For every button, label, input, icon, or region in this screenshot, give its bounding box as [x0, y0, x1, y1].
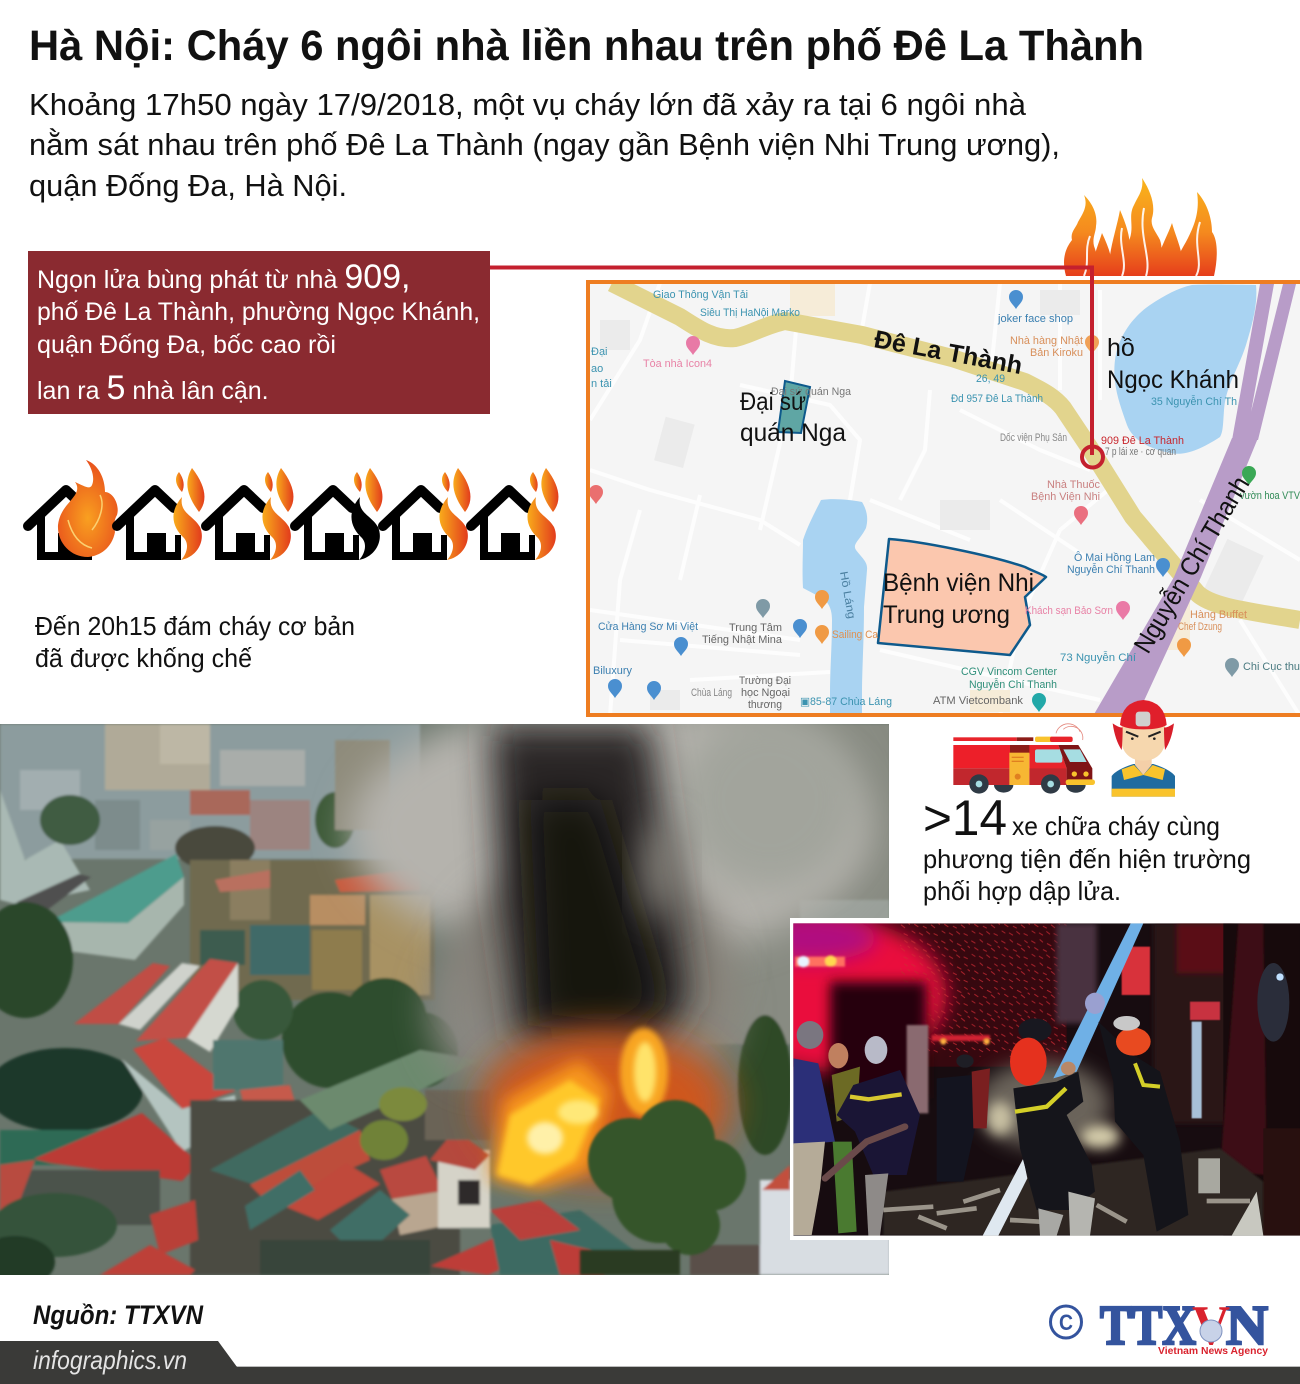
source credit: Nguồn: TTXVN — [33, 1300, 203, 1330]
firefighter with hose — [837, 1036, 920, 1236]
map: embassy label: quán Nga — [740, 419, 846, 447]
logo: TTXVN: V — [1192, 1295, 1230, 1357]
intro text — [29, 87, 1060, 203]
house 1 — [28, 490, 92, 560]
map: place labels: ao — [591, 363, 603, 375]
map: place labels: Giao Thông Vận Tải — [653, 289, 748, 301]
map: building footprints — [600, 290, 1264, 710]
map: place labels: 35 Nguyễn Chí Th — [1151, 395, 1237, 408]
right side — [700, 724, 890, 1044]
intro text: nằm sát nhau trên phố Đê La Thành (ngay gần Bệnh viện Nhi Trung ương), — [29, 127, 1060, 162]
footer bar — [0, 1341, 1300, 1384]
icon: firefighter — [1112, 700, 1175, 797]
firefighter left with ladder — [1010, 1018, 1095, 1236]
map: place labels: 73 Nguyễn Chí — [1060, 651, 1136, 664]
ladder — [1053, 923, 1143, 1078]
map: place labels: Tòa nhà Icon4 — [643, 358, 712, 370]
logo: TTXVN: Vietnam News Agency — [1158, 1345, 1268, 1357]
house 6 — [471, 468, 558, 560]
map: lake label: Ngọc Khánh — [1107, 366, 1239, 394]
map: place labels: Bản Kiroku — [1030, 347, 1083, 359]
second truck — [932, 1035, 990, 1045]
map: hospital label: Bệnh viện Nhi — [883, 569, 1034, 597]
photo: firefighters at night — [790, 918, 1300, 1240]
smoke — [350, 700, 870, 1080]
map: embassy label: Đại sứ — [740, 388, 806, 416]
icon: flames above map — [1064, 178, 1217, 276]
map: minor streets — [590, 283, 1300, 716]
left and central trees — [0, 902, 73, 1018]
house 5 — [383, 468, 470, 560]
map: road label Nguyen Chi Thanh: Nguyễn Chí Thanh — [1127, 471, 1255, 658]
icon: fire truck — [953, 724, 1095, 794]
map: road label De La Thanh: Đê La Thành — [872, 325, 1025, 380]
callout box: fire origin: lan ra 5 nhà lân cận. — [37, 369, 269, 407]
map: place labels: học Ngoại — [741, 687, 790, 699]
map: place labels: Hàng Buffet — [1190, 609, 1247, 621]
flames — [480, 1028, 730, 1190]
small trees — [425, 1090, 490, 1140]
truck glow — [793, 923, 1067, 1067]
logo: TTXVN — [1050, 1295, 1268, 1357]
map: place labels: Biluxury — [593, 665, 632, 677]
truck light bar — [795, 955, 845, 967]
text: fire trucks statistic: phối hợp dập lửa. — [923, 876, 1121, 906]
map: place labels: Siêu Thị HaNội Marko — [700, 307, 800, 319]
central buildings — [190, 860, 435, 1000]
text: fire trucks statistic: phương tiện đến hiện trường — [923, 844, 1251, 874]
leader line from callout to fire location — [490, 268, 1103, 468]
ground debris — [883, 1148, 1263, 1236]
map: place labels — [591, 289, 1300, 711]
map: place labels: Hồ Láng — [837, 570, 857, 620]
map: place labels: Đd 957 Đê La Thành — [951, 393, 1043, 405]
map: border — [588, 282, 1300, 715]
map: hospital area — [878, 539, 1046, 655]
canopy — [34, 1113, 199, 1181]
shop side — [1153, 923, 1240, 1123]
map: Nguyen Chi Thanh road — [1093, 284, 1296, 716]
map: embassy area — [778, 381, 810, 433]
map: place labels: Ô Mai Hồng Lam — [1074, 551, 1155, 564]
map: place labels: Chef Dzung — [1178, 621, 1222, 633]
house 2 — [117, 468, 204, 560]
map: hospital label: Trung ương — [883, 601, 1010, 629]
right tree and mirror — [1223, 923, 1300, 1236]
intro text: quận Đống Đa, Hà Nội. — [29, 168, 347, 203]
text: fire trucks statistic — [923, 790, 1251, 906]
map: place labels: Khách sạn Bảo Sơn — [1025, 605, 1113, 617]
house 3 — [206, 468, 293, 560]
map: place labels: Trường Đại — [739, 675, 791, 687]
person in blue shirt — [793, 1021, 835, 1235]
logo: TTXVN: N — [1226, 1295, 1268, 1357]
text: fire controlled: Đến 20h15 đám cháy cơ bản — [35, 611, 355, 641]
map: place labels: n tải — [591, 378, 612, 390]
map: Ho Lang lake — [803, 499, 867, 716]
map: embassy label — [740, 388, 846, 447]
map: place labels: Cửa Hàng Sơ Mi Việt — [598, 621, 698, 633]
house 4 — [295, 468, 382, 560]
foreground tree — [580, 1100, 746, 1275]
map: place labels: Bệnh Viện Nhi — [1031, 491, 1100, 503]
map: place labels: 909 Đê La Thành — [1101, 435, 1184, 447]
logo: TTXVN: TTX — [1100, 1295, 1196, 1357]
callout box: fire origin — [28, 251, 490, 414]
callout box: fire origin: Ngọn lửa bùng phát từ nhà 909, — [37, 258, 410, 296]
officer in olive uniform — [828, 1043, 860, 1233]
map: place labels: 7 p lái xe · cơ quan — [1105, 446, 1176, 458]
map: pins — [589, 290, 1256, 712]
map: place labels: 26, 49 — [976, 373, 1005, 385]
map: lake label: hồ — [1107, 334, 1135, 362]
title: Hà Nội: Cháy 6 ngôi nhà liền nhau trên phố Đê La Thành — [29, 22, 1144, 70]
street light — [977, 1062, 1110, 1148]
footer site name: infographics.vn — [33, 1345, 187, 1375]
map: place labels: CGV Vincom Center — [961, 666, 1057, 678]
hose — [825, 1127, 905, 1178]
map: hospital label — [883, 569, 1034, 629]
red-roof long buildings — [74, 963, 170, 1024]
map panel — [588, 281, 1300, 716]
map: place labels: Trung Tâm — [729, 622, 782, 634]
house 1 large flame — [58, 460, 118, 557]
callout box: fire origin: phố Đê La Thành, phường Ngọc Khánh, — [37, 298, 480, 326]
map: lake label — [1107, 334, 1239, 394]
text: fire controlled: đã được khống chế — [35, 643, 253, 673]
map: place labels: Đại — [591, 346, 608, 358]
text: fire trucks statistic: >14 — [923, 790, 1007, 846]
logo: TTXVN: C — [1059, 1310, 1073, 1335]
firefighter right with ladder — [1085, 993, 1188, 1232]
photo: aerial view of the fire — [0, 700, 890, 1288]
person in background — [937, 1075, 975, 1182]
map: place labels: Nhà Thuốc — [1047, 479, 1100, 491]
map: place labels: ▣85-87 Chùa Láng — [800, 696, 892, 708]
map: place labels: Chi Cục thu — [1243, 661, 1300, 673]
map: place labels: thương — [748, 699, 782, 711]
map: place labels: Sailing Ca — [832, 629, 879, 641]
callout box: fire origin: quận Đống Đa, bốc cao rồi — [37, 331, 336, 359]
map: lake Ngoc Khanh — [1114, 285, 1256, 454]
text: fire controlled — [35, 611, 355, 673]
text: fire trucks statistic: xe chữa cháy cùng — [1012, 811, 1220, 841]
map: De La Thanh road — [612, 283, 1300, 620]
map: place labels: Đại sứ quán Nga — [771, 386, 852, 398]
map: place labels: Tiếng Nhật Mina — [702, 634, 783, 646]
map: place labels: Nguyễn Chí Thanh — [1067, 563, 1155, 576]
map: place labels: Dốc viện Phụ Sản — [1000, 432, 1067, 444]
icon: six burning houses — [28, 460, 558, 560]
upper city — [0, 724, 420, 859]
teal building — [16, 873, 90, 910]
house cluster — [190, 1100, 460, 1275]
map: place labels: Nguyễn Chí Thanh — [969, 678, 1057, 691]
map: place labels: ATM Vietcombank — [933, 695, 1023, 707]
map: place labels: Nhà hàng Nhật — [1010, 335, 1083, 347]
map: place labels: joker face shop — [997, 313, 1073, 325]
intro text: Khoảng 17h50 ngày 17/9/2018, một vụ cháy lớn đã xảy ra tại 6 ngôi nhà — [29, 87, 1027, 122]
map: place labels: Chùa Láng — [691, 687, 732, 699]
